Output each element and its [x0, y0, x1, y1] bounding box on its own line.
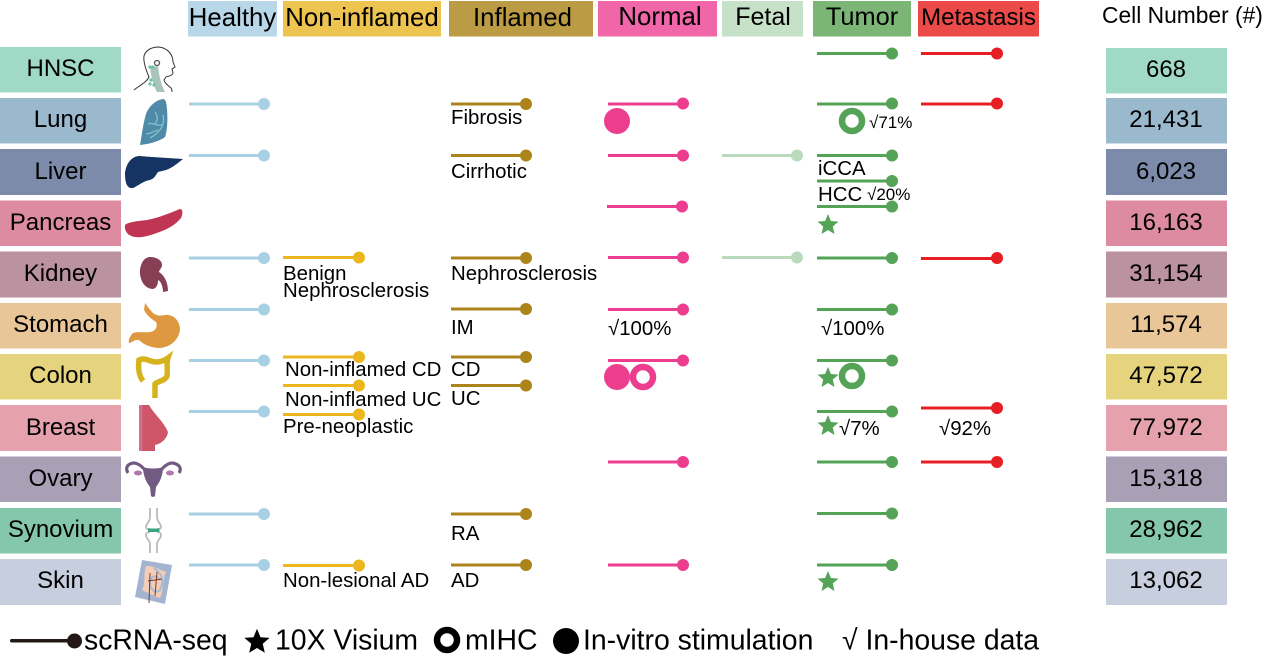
icon: stomach: [129, 303, 180, 348]
column: Fetal lollipops: [722, 150, 803, 264]
icon: colon: [139, 358, 168, 398]
lollipop: Normal Liver: [608, 150, 689, 162]
legend: [10, 624, 1039, 656]
marker: 10X Visium Breast: [818, 415, 838, 435]
cell count: Lung: 21,431: [1129, 106, 1203, 133]
label: HCC in-house 20%: √20%: [867, 185, 910, 204]
column: Non-inflamed lollipops and labels: [283, 252, 441, 592]
cell count: Ovary: [1106, 456, 1227, 502]
lollipop: Normal Stomach: [608, 304, 689, 316]
row label: Kidney: [0, 252, 121, 298]
cell count: Colon: 47,572: [1129, 362, 1203, 389]
header: Tumor: [813, 1, 911, 36]
marker: 10X Visium Pancreas: [818, 214, 838, 234]
cell count: Stomach: [1106, 303, 1227, 348]
marker: mIHC Lung: [842, 111, 862, 131]
header: Tumor: Tumor: [826, 3, 899, 31]
icon: head and neck: [134, 47, 175, 92]
label: UC: UC: [451, 388, 480, 410]
row label: Colon: [0, 354, 121, 400]
icon: synovial joint: [146, 508, 161, 553]
label: CD: CD: [451, 359, 480, 381]
row label: Kidney: Kidney: [24, 260, 97, 287]
legend: scRNA-seq: scRNA-seq: [84, 624, 228, 656]
label: IM: IM: [451, 317, 474, 339]
cell count: Pancreas: 16,163: [1129, 209, 1203, 236]
icon: skin: [135, 560, 172, 604]
column: Tumor lollipops, markers and labels: [817, 48, 912, 591]
lollipop: Tumor Synovium: [817, 508, 898, 520]
lollipop: Healthy Stomach: [189, 304, 270, 316]
header: Fetal: [722, 1, 803, 36]
header: Healthy: Healthy: [189, 4, 276, 32]
row label: Lung: Lung: [34, 106, 87, 133]
row label: Synovium: Synovium: [8, 516, 113, 543]
row label: Breast: [0, 405, 121, 451]
legend: mIHC: mIHC: [465, 624, 538, 656]
lollipop: Fibrosis: [451, 98, 532, 110]
lollipop: Healthy Skin: [189, 559, 270, 571]
organ icons: [125, 47, 183, 604]
lollipop: Non-inflamed CD: [283, 351, 365, 363]
lollipop: Healthy Synovium: [189, 508, 270, 520]
lollipop: Normal Pancreas: [607, 200, 688, 212]
label: RA: RA: [451, 523, 480, 545]
tissue row labels: [0, 47, 121, 605]
lollipop: Metastasis Breast: [921, 402, 1003, 414]
label: Stomach in-house 100%: √100%: [608, 318, 671, 340]
label: Pre-neoplastic: Pre-neoplastic: [283, 416, 413, 438]
cell count: Liver: 6,023: [1136, 158, 1196, 185]
label: Non-inflamed CD: Non-inflamed CD: [285, 359, 441, 381]
label: Cirrhotic: Cirrhotic: [451, 161, 527, 183]
legend: In-house data: √ In-house data: [842, 624, 1039, 656]
cell count: Skin: 13,062: [1129, 567, 1203, 594]
row label: Breast: Breast: [26, 414, 96, 441]
lollipop: Healthy Kidney: [189, 252, 270, 264]
lollipop: Metastasis HNSC: [921, 48, 1003, 60]
lollipop: Tumor HCC: [817, 175, 898, 187]
label: HCC: HCC: [818, 184, 862, 206]
column: Normal lollipops and markers: [604, 98, 689, 571]
column: Healthy lollipops: [189, 98, 270, 571]
legend: In-vitro stimulation: In-vitro stimulation: [583, 624, 813, 656]
row label: Ovary: Ovary: [28, 465, 93, 492]
cell count: HNSC: 668: [1146, 56, 1186, 83]
cell count: Skin: [1106, 559, 1227, 605]
row label: HNSC: HNSC: [26, 55, 95, 82]
cell count: Ovary: 15,318: [1129, 465, 1203, 492]
lollipop: Healthy Breast: [189, 406, 270, 418]
label: Non-lesional AD: Non-lesional AD: [283, 570, 429, 592]
cell count: Liver: [1106, 149, 1227, 195]
icon: pancreas: [125, 209, 182, 237]
marker: 10X Visium Colon: [818, 367, 838, 387]
cell count: Pancreas: [1106, 200, 1227, 246]
lollipop: CD: [451, 351, 532, 363]
icon: kidney: [140, 257, 168, 292]
lollipop: UC: [451, 380, 532, 392]
lollipop: IM: [451, 303, 532, 315]
icon: ovary and uterus: [127, 463, 180, 497]
lollipop: Non-inflamed UC: [283, 380, 365, 392]
lollipop: Normal Ovary: [608, 456, 689, 468]
lollipop: Fetal Liver: [722, 150, 803, 162]
cell count: Lung: [1106, 98, 1227, 144]
lollipop: AD: [451, 559, 532, 571]
lollipop: Normal Kidney: [608, 252, 689, 264]
lollipop: Normal Colon: [608, 354, 689, 366]
legend: scRNA-seq: [10, 624, 228, 656]
row label: Stomach: [0, 303, 121, 348]
cell count: Synovium: [1106, 508, 1227, 554]
lollipop: Tumor Breast: [817, 406, 898, 418]
cell count: Synovium: 28,962: [1129, 516, 1203, 543]
column headers: [188, 1, 1263, 36]
lollipop: Tumor Kidney: [817, 252, 898, 264]
row label: Pancreas: [0, 200, 121, 246]
row label: Liver: Liver: [34, 158, 87, 185]
row label: Liver: [0, 149, 121, 195]
marker: in-vitro stimulation Lung: [604, 108, 630, 134]
lollipop: Tumor Stomach: [817, 304, 898, 316]
lollipop: Nephrosclerosis: [451, 252, 532, 264]
lollipop: Non-inflamed Kidney: [283, 252, 365, 264]
row label: Colon: Colon: [29, 362, 92, 389]
icon: lung: [140, 99, 167, 145]
label: Fibrosis: Fibrosis: [451, 107, 522, 129]
row label: Lung: [0, 98, 121, 144]
lollipop: Metastasis Lung: [921, 98, 1003, 110]
label: Non-inflamed UC: Non-inflamed UC: [285, 389, 441, 411]
header: Cell Number: Cell Number (#): [1102, 2, 1263, 28]
label: Benign Nephrosclerosis: Nephrosclerosis: [283, 280, 429, 302]
label: Breast in-house 7%: √7%: [839, 418, 880, 440]
lollipop: Tumor Lung: [817, 98, 898, 110]
lollipop: Tumor Skin: [817, 559, 898, 571]
row label: Synovium: [0, 508, 121, 554]
lollipop: Tumor iCCA: [817, 150, 898, 162]
lollipop: Metastasis Kidney: [921, 252, 1003, 264]
lollipop: Tumor HNSC: [817, 48, 898, 60]
lollipop: Tumor Pancreas: [817, 200, 898, 212]
label: Benign Nephrosclerosis: [283, 263, 429, 302]
label: Breast metastasis in-house 92%: √92%: [939, 418, 991, 440]
cell count: Stomach: 11,574: [1130, 311, 1202, 338]
column: Inflamed lollipops and labels: [451, 98, 597, 592]
cell number column: [1106, 48, 1227, 605]
lollipop: Tumor Colon: [817, 354, 898, 366]
lollipop: Cirrhotic: [451, 150, 532, 162]
lollipop: Non-lesional AD: [283, 560, 365, 572]
row label: HNSC: [0, 47, 121, 92]
lollipop: Pre-neoplastic: [283, 408, 365, 420]
lollipop: Metastasis Ovary: [921, 456, 1003, 468]
lollipop: Normal Skin: [608, 559, 689, 571]
cell count: Breast: [1106, 405, 1227, 451]
lollipop: Healthy Colon: [189, 354, 270, 366]
header: Metastasis: Metastasis: [921, 4, 1036, 31]
cell count: HNSC: [1106, 48, 1227, 94]
header: Normal: Normal: [618, 3, 702, 31]
header: Inflamed: Inflamed: [473, 4, 572, 32]
lollipop: Fetal Kidney: [722, 252, 803, 264]
lollipop: Healthy Lung: [189, 98, 270, 110]
cell count: Colon: [1106, 354, 1227, 400]
marker: mIHC Colon tumor: [842, 366, 862, 386]
lollipop: Normal Lung: [608, 98, 689, 110]
marker: 10X Visium Skin: [818, 571, 838, 591]
lollipop: RA: [451, 508, 532, 520]
cell count: Kidney: [1106, 252, 1227, 298]
label: Lung in-house 71%: √71%: [869, 113, 912, 132]
label: AD: AD: [451, 570, 479, 592]
cell count: Breast: 77,972: [1129, 414, 1203, 441]
legend: 10X Visium: 10X Visium: [275, 624, 418, 656]
header: Fetal: Fetal: [735, 3, 791, 31]
row label: Ovary: [0, 456, 121, 502]
label: Nephrosclerosis: Nephrosclerosis: [451, 263, 597, 285]
label: Stomach tumor in-house 100%: √100%: [821, 318, 884, 340]
icon: breast: [139, 405, 168, 451]
header: Normal: [598, 1, 717, 36]
marker: mIHC Colon: [633, 367, 653, 387]
label: Benign Nephrosclerosis: Benign: [283, 263, 346, 285]
header: Non-inflamed: Non-inflamed: [285, 4, 439, 32]
label: iCCA: iCCA: [818, 158, 866, 180]
header: Inflamed: [449, 1, 593, 36]
column: Metastasis lollipops and labels: [921, 48, 1003, 468]
row label: Skin: [0, 559, 121, 605]
row label: Stomach: Stomach: [13, 311, 108, 338]
row label: Pancreas: Pancreas: [10, 209, 111, 236]
cell count: Kidney: 31,154: [1129, 260, 1203, 287]
icon: liver: [125, 156, 183, 188]
row label: Skin: Skin: [37, 567, 84, 594]
marker: in-vitro stimulation Colon: [604, 364, 630, 390]
lollipop: Tumor Ovary: [817, 456, 898, 468]
lollipop: Healthy Liver: [189, 150, 270, 162]
